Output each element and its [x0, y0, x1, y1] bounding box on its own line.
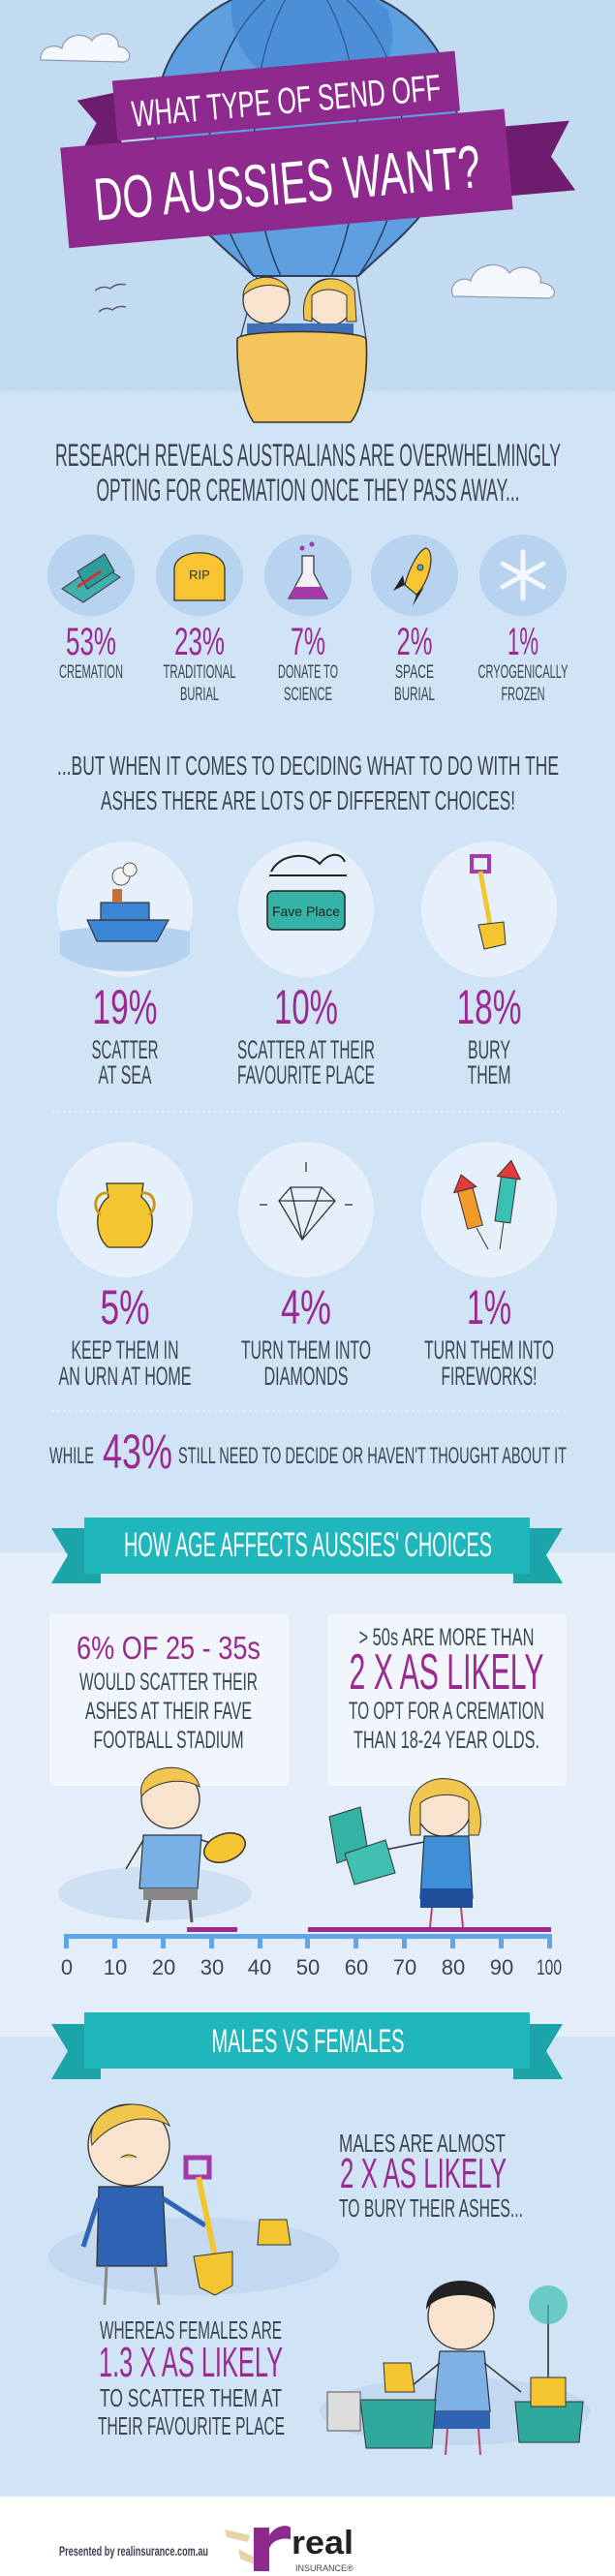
- undecided statement: 43%: [103, 1425, 172, 1479]
- callout: 25-35s: WOULD SCATTER THEIR: [79, 1669, 258, 1696]
- age timeline: 10: [104, 1955, 127, 1979]
- stat: cryogenically frozen: 1%: [507, 621, 538, 663]
- stat: traditional burial: 23%: [174, 621, 225, 663]
- stat: donate to science: 7%: [291, 621, 325, 663]
- age timeline: 60: [345, 1955, 368, 1979]
- cloud left: [41, 34, 130, 62]
- callout: 25-35s: FOOTBALL STADIUM: [93, 1727, 244, 1754]
- stat: space burial: 2%: [397, 621, 432, 663]
- choice: favourite place: 10%: [274, 980, 338, 1034]
- age timeline: 40: [248, 1955, 271, 1979]
- choice: urn at home: KEEP THEM IN: [72, 1335, 178, 1365]
- choice: urn at home: [57, 1142, 193, 1391]
- illustration: man with spade: [48, 2104, 339, 2305]
- birds: [95, 285, 126, 312]
- hot air balloon: [155, 0, 457, 422]
- illustration: boy with football: [58, 1767, 252, 1922]
- males text: MALES ARE ALMOST: [339, 2129, 506, 2158]
- cloud right: [452, 265, 554, 298]
- title banner line 1: WHAT TYPE OF SEND OFF: [130, 68, 443, 136]
- ashes heading: [57, 751, 559, 815]
- stat: cremation: [47, 535, 135, 683]
- logo: real insurance: real: [292, 2525, 354, 2561]
- females text: TO SCATTER THEM AT: [100, 2383, 282, 2412]
- illustration: woman gardening: [320, 2281, 591, 2455]
- choice: bury them: THEM: [467, 1060, 511, 1089]
- choice: diamonds: 4%: [281, 1280, 331, 1334]
- callout: 25-35s: [49, 1613, 289, 1786]
- icon: diamond: [260, 1162, 353, 1240]
- choice: bury them: [421, 842, 557, 1089]
- icon: fireworks: [450, 1159, 523, 1249]
- title banner line 1: [76, 51, 461, 152]
- choice: bury them: 18%: [457, 980, 521, 1034]
- stat: donate to science: SCIENCE: [284, 685, 332, 705]
- people in basket: [243, 277, 356, 341]
- icon: snowflake: [503, 552, 543, 598]
- stat: traditional burial: [156, 535, 243, 705]
- age timeline: 70: [393, 1955, 416, 1979]
- stat: space burial: BURIAL: [394, 685, 435, 705]
- age timeline: 80: [442, 1955, 465, 1979]
- age timeline: 50: [296, 1955, 320, 1979]
- stat: cremation: CREMATION: [59, 662, 123, 683]
- banner: males vs females: MALES VS FEMALES: [211, 2023, 405, 2060]
- icon: fave place sign: Fave Place: [272, 904, 340, 919]
- choice: fireworks: FIREWORKS!: [442, 1362, 537, 1391]
- stat: donate to science: [264, 535, 352, 705]
- choice: fireworks: 1%: [467, 1280, 511, 1334]
- stat: cryogenically frozen: FROZEN: [502, 685, 544, 705]
- stat: space burial: SPACE: [395, 662, 434, 683]
- age timeline: 100: [537, 1955, 562, 1979]
- choice: diamonds: [238, 1142, 374, 1391]
- females text: WHEREAS FEMALES ARE: [100, 2315, 282, 2345]
- choice: scatter at sea: SCATTER: [91, 1035, 159, 1064]
- stat: cremation: 53%: [66, 621, 116, 663]
- stat: donate to science: DONATE TO: [278, 662, 338, 683]
- age timeline: 0: [61, 1955, 73, 1979]
- icon: ship: [60, 863, 190, 971]
- choice: favourite place: [237, 842, 375, 1089]
- choice: bury them: BURY: [468, 1035, 510, 1064]
- choice: favourite place: SCATTER AT THEIR: [237, 1035, 375, 1064]
- choice: urn at home: AN URN AT HOME: [58, 1362, 192, 1391]
- age timeline: 30: [200, 1955, 224, 1979]
- illustration: woman with matches: [329, 1779, 480, 1927]
- stat: traditional burial: BURIAL: [180, 685, 219, 705]
- age timeline: 90: [490, 1955, 513, 1979]
- icon: urn: [96, 1183, 154, 1247]
- background sky: [0, 0, 615, 387]
- choice: diamonds: DIAMONDS: [263, 1362, 349, 1391]
- icon: spade: [472, 856, 506, 949]
- callout: 25-35s: 6% OF 25 - 35s: [77, 1630, 261, 1666]
- icon: flask: [289, 542, 327, 598]
- callout: over 50s: [327, 1613, 567, 1786]
- undecided statement: WHILE: [49, 1443, 94, 1469]
- banner: how age affects: [51, 1518, 563, 1583]
- choice: scatter at sea: AT SEA: [99, 1060, 151, 1089]
- footer credit: Presented by realinsurance.com.au: [59, 2543, 208, 2559]
- icon: rocket: [393, 548, 431, 606]
- females text: THEIR FAVOURITE PLACE: [98, 2411, 285, 2440]
- stat: cryogenically frozen: [478, 535, 569, 705]
- females text: [98, 2315, 285, 2440]
- stat: space burial: [371, 535, 458, 705]
- undecided statement: [49, 1425, 567, 1479]
- choice: urn at home: 5%: [101, 1280, 149, 1334]
- banner: males vs females: [51, 2012, 563, 2079]
- choice: favourite place: FAVOURITE PLACE: [237, 1060, 375, 1089]
- logo: real insurance: INSURANCE®: [295, 2563, 354, 2573]
- age timeline: 20: [152, 1955, 175, 1979]
- icon: tombstone: [174, 553, 225, 600]
- choice: scatter at sea: [57, 842, 193, 1089]
- choice: diamonds: TURN THEM INTO: [241, 1335, 371, 1365]
- choice: scatter at sea: 19%: [93, 980, 157, 1034]
- choice: fireworks: [421, 1142, 557, 1391]
- icon: matchbook: [62, 554, 120, 602]
- intro text: [55, 438, 561, 507]
- males text: [339, 2129, 523, 2223]
- females text: 1.3 X AS LIKELY: [99, 2339, 283, 2386]
- males text: 2 X AS LIKELY: [340, 2150, 507, 2197]
- icon: tombstone: RIP: [189, 567, 210, 582]
- logo: real insurance: [225, 2525, 354, 2573]
- icon: fave place sign: [267, 855, 347, 930]
- stat: traditional burial: TRADITIONAL: [163, 662, 236, 683]
- callout: 25-35s: ASHES AT THEIR FAVE: [85, 1698, 252, 1725]
- age timeline: [61, 1927, 562, 1979]
